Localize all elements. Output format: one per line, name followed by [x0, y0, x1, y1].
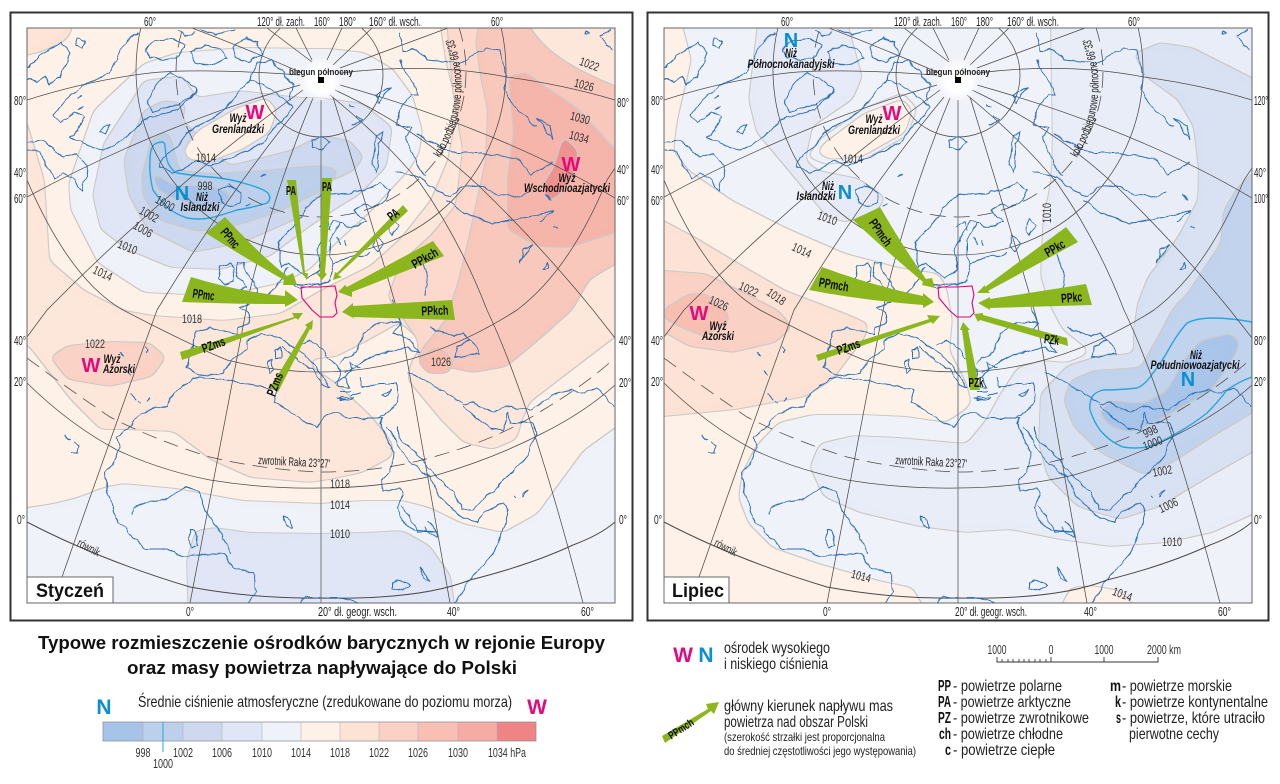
graticule labels: 120° dł. zach. [894, 14, 942, 29]
legend: high and low pressure centres: W [673, 644, 693, 667]
pressure legend: 1026 [408, 745, 428, 760]
pressure centres July: N [1181, 369, 1195, 391]
graticule labels: 60° [581, 604, 594, 619]
graticule [664, 0, 1252, 603]
graticule labels: 40° [651, 333, 663, 348]
month label January: Styczeń [36, 581, 104, 602]
isobar and parallel labels: 1014 [91, 263, 115, 284]
pressure centres July: W [690, 303, 709, 325]
graticule labels: 20° dł. geogr. wsch. [955, 604, 1027, 619]
isobar and parallel labels: 1000 [1141, 433, 1165, 453]
pressure centres July [690, 30, 1240, 391]
graticule labels: 60° [1128, 14, 1140, 29]
graticule labels: 60° [14, 191, 26, 206]
pressure centres July: Niż [1190, 348, 1202, 362]
legend: high and low pressure centres: ośrodek wysokiego [724, 640, 830, 657]
graticule labels: 40° [14, 165, 26, 180]
air mass arrows January: PZms [200, 334, 227, 356]
graticule labels: 0° [619, 512, 627, 527]
pressure centres July: Azorski [701, 329, 734, 343]
pressure centres July: Grenlandzki [848, 123, 901, 137]
legend: air mass abbreviations, right column: - powietrze morskie [1122, 678, 1232, 695]
pressure centres January: Islandzki [180, 200, 220, 214]
Polish border [938, 286, 974, 317]
isobar and parallel labels: 1000 [153, 192, 177, 215]
pressure centres January: Grenlandzki [212, 122, 265, 136]
isobar and parallel labels: 1014 [1111, 584, 1134, 604]
north pole marker: biegun północny [926, 67, 991, 78]
pressure legend: 1014 [291, 745, 311, 760]
air mass arrows January: PPmc [192, 286, 216, 304]
isobar and parallel labels: 998 [1141, 422, 1160, 441]
legend: air mass abbreviations, left column [938, 678, 1089, 759]
air mass arrows July: PPkc [1042, 236, 1068, 260]
legend: air mass abbreviations, right column: k [1115, 694, 1121, 711]
air mass arrows July: PZms [835, 336, 862, 358]
legend: high and low pressure centres: N [698, 644, 714, 667]
legend: air mass abbreviations, left column: ch [939, 726, 951, 743]
month label July [664, 577, 729, 603]
graticule labels: 20° [14, 374, 26, 389]
graticule labels: 80° [1254, 333, 1266, 348]
pressure centres January: Wyż [558, 171, 576, 185]
graticule labels: 60° [651, 193, 663, 208]
isobar and parallel labels: 1002 [137, 203, 161, 226]
graticule labels: 20° [651, 374, 663, 389]
air mass arrows January: PPkch [409, 245, 441, 272]
legend: air mass abbreviations, left column: - powietrze ciepłe [953, 742, 1055, 759]
pressure centres July: Wyż [710, 319, 726, 333]
air mass arrows July: PPkc [1060, 289, 1083, 306]
air mass arrows January: PZms [263, 370, 286, 398]
pressure legend [96, 692, 547, 771]
graticule labels: 40° [617, 162, 629, 177]
legend: air mass abbreviations, right column: s [1116, 710, 1121, 727]
panel: January map [10, 12, 634, 622]
isobar and parallel labels: 1014 [790, 240, 814, 261]
pressure centres January: W [562, 154, 581, 176]
coastlines [665, 30, 1250, 603]
isobar and parallel labels: 1018 [330, 477, 350, 491]
isobar and parallel labels: koło podbiegunowe północne 66°33' [1070, 40, 1101, 158]
isobar and parallel labels: 1026 [707, 293, 731, 314]
graticule labels: 0° [186, 604, 194, 619]
air mass arrows January: PPkch [421, 303, 449, 318]
pressure centres January: Niż [196, 190, 208, 204]
isobar and parallel labels: 1018 [182, 312, 202, 326]
isobar and parallel labels: 1010 [1162, 535, 1182, 549]
graticule labels: 160° [314, 14, 330, 29]
north pole marker: biegun północny [289, 67, 354, 78]
legend: air mass arrow: do średniej częstotliwości jego występowania) [724, 744, 916, 758]
isobar and parallel labels: 1022 [737, 279, 761, 300]
graticule labels: 20° dł. geogr. wsch. [318, 604, 397, 619]
isobar and parallel labels: 1018 [764, 285, 789, 308]
scale bar [988, 642, 1181, 662]
legend: air mass abbreviations, right column: m [1110, 678, 1121, 695]
air mass arrows January: PA [322, 179, 332, 194]
isobar and parallel labels: zwrotnik Raka 23°27' [258, 453, 330, 471]
pressure legend: 998 [136, 745, 150, 760]
graticule labels: 160° [951, 14, 967, 29]
legend: high and low pressure centres: i niskiego ciśnienia [724, 656, 828, 673]
graticule labels: 0° [823, 604, 831, 619]
pressure centres January: Wschodnioazjatycki [524, 181, 610, 195]
graticule labels [14, 14, 631, 619]
isobar and parallel labels: 1014 [196, 151, 216, 165]
map border [664, 28, 1252, 603]
graticule labels: 60° [617, 193, 629, 208]
pressure legend: Średnie ciśnienie atmosferyczne (zredukowane do poziomu morza) [138, 692, 512, 711]
pressure fields July [664, 28, 1252, 602]
coastlines [28, 30, 613, 603]
graticule labels: 20° [1254, 374, 1266, 389]
pressure legend: W [527, 696, 547, 719]
panel: July map [646, 12, 1270, 622]
graticule [27, 0, 615, 603]
title: oraz masy powietrza napływające do Polski [127, 657, 517, 678]
legend: high and low pressure centres [673, 640, 830, 673]
month label July: Lipiec [672, 581, 724, 602]
isobar and parallel labels [707, 40, 1182, 604]
graticule labels: 40° [651, 162, 663, 177]
graticule labels: 0° [1254, 512, 1262, 527]
air mass arrows January: PPmc [218, 225, 243, 251]
isobar and parallel labels [75, 40, 601, 560]
pressure centres January: W [82, 355, 101, 377]
isobar and parallel labels: 1026 [431, 355, 451, 369]
graticule labels: 120° dł. zach. [257, 14, 305, 29]
scale bar: 2000 km [1147, 642, 1181, 657]
air mass arrows July: PZk [1043, 331, 1061, 348]
isobar and parallel labels: równik [712, 536, 740, 560]
graticule labels: 40° [14, 333, 26, 348]
pressure centres January: W [246, 102, 265, 124]
pressure centres July: Południowoazjatycki [1150, 358, 1240, 372]
legend: air mass arrow [662, 698, 916, 758]
graticule labels: 60° [1218, 604, 1231, 619]
legend: air mass abbreviations, left column: - powietrze zwrotnikowe [953, 710, 1089, 727]
pressure centres January [82, 102, 610, 377]
isobar and parallel labels: 1022 [85, 337, 105, 351]
pressure centres January: Azorski [102, 362, 135, 376]
graticule labels: 40° [1084, 604, 1097, 619]
pressure legend: 1002 [173, 745, 193, 760]
legend: air mass abbreviations, left column: c [945, 742, 951, 759]
legend: air mass arrow: główny kierunek napływu mas [724, 698, 893, 715]
pressure centres January: Wyż [230, 111, 246, 125]
pressure centres January: Wyż [104, 352, 120, 366]
north pole marker [289, 58, 354, 102]
graticule labels: 180° [339, 14, 356, 29]
isobar and parallel labels: 1022 [578, 54, 601, 74]
pressure legend: 1006 [212, 745, 232, 760]
legend: air mass abbreviations, left column: PA [938, 694, 951, 711]
scale bar: 1000 [1094, 642, 1114, 657]
pressure centres July: Niż [822, 179, 834, 193]
pressure legend: N [96, 696, 112, 719]
isobar and parallel labels: 1030 [569, 109, 592, 128]
isobar and parallel labels: 998 [198, 179, 213, 193]
graticule labels: 160° dł. wsch. [369, 14, 421, 29]
isobar and parallel labels: 1006 [1156, 495, 1181, 516]
isobar and parallel labels: 1010 [330, 527, 350, 541]
map border [27, 28, 615, 603]
month label January [27, 577, 113, 603]
legend: air mass abbreviations, left column: - powietrze arktyczne [953, 694, 1071, 711]
graticule labels: 0° [654, 512, 662, 527]
scale bar: 1000 [988, 642, 1006, 657]
air mass arrows July: PPmch [818, 275, 850, 295]
isobar and parallel labels: zwrotnik Raka 23°27' [895, 453, 967, 471]
isobar and parallel labels: równik [75, 536, 103, 560]
legend: air mass abbreviations, left column: PP [938, 678, 951, 695]
isobar and parallel labels: 1014 [843, 152, 863, 166]
legend: air mass abbreviations, left column: PZ [938, 710, 951, 727]
pressure centres July: Niż [785, 46, 797, 60]
pressure legend: 1034 hPa [488, 745, 527, 760]
graticule labels: 80° [14, 93, 26, 108]
title: Typowe rozmieszczenie ośrodków barycznych w rejonie Europy [38, 632, 606, 653]
isobar and parallel labels: 1034 [568, 128, 591, 147]
isobar and parallel labels: koło podbiegunowe północne 66°33' [432, 40, 464, 158]
graticule labels: 0° [17, 512, 25, 527]
air mass arrows January [180, 178, 455, 398]
pressure centres July: W [883, 103, 902, 125]
north pole marker [926, 58, 991, 102]
isobar and parallel labels: 1002 [1151, 462, 1174, 480]
graticule labels: 20° [619, 375, 631, 390]
isobar and parallel labels: 1026 [573, 76, 596, 95]
pressure legend: 1030 [448, 745, 468, 760]
pressure centres July: N [784, 30, 798, 52]
graticule labels [651, 14, 1268, 619]
air mass arrows July: PZk [968, 375, 984, 390]
legend: air mass arrow: PPmch [666, 717, 697, 742]
isobar and parallel labels: 1006 [131, 218, 155, 241]
air mass arrows January: PA [286, 183, 296, 198]
legend: air mass abbreviations, left column: - powietrze polarne [953, 678, 1062, 695]
pressure centres July: Islandzki [796, 189, 836, 203]
graticule labels: 60° [491, 14, 503, 29]
isobar and parallel labels: 1010 [1040, 203, 1054, 223]
isobar and parallel labels: 1010 [116, 237, 140, 258]
scale bar: 0 [1048, 642, 1054, 657]
graticule labels: 40° [1254, 165, 1266, 180]
graticule labels: 40° [447, 604, 460, 619]
legend: air mass abbreviations, right column: pierwotne cechy [1129, 726, 1219, 743]
isobar and parallel labels: 1010 [816, 208, 839, 228]
legend: air mass abbreviations, right column [1110, 678, 1268, 743]
isobar and parallel labels: 1014 [330, 498, 350, 512]
graticule labels: 160° dł. wsch. [1007, 14, 1059, 29]
pressure centres January: N [175, 183, 189, 205]
graticule labels: 80° [617, 95, 629, 110]
pressure legend: 1018 [330, 745, 350, 760]
pressure legend: 1022 [369, 745, 389, 760]
pressure centres July: Północnokanadyjski [748, 57, 835, 71]
isobar 1000 [1090, 318, 1252, 448]
air mass arrows July [809, 207, 1092, 390]
Polish border [301, 286, 337, 317]
pressure legend: 1000 [153, 756, 173, 771]
pressure fields January [28, 28, 614, 602]
legend: air mass abbreviations, left column: - powietrze chłodne [953, 726, 1063, 743]
pressure legend: 1010 [252, 745, 272, 760]
graticule labels: 60° [144, 14, 156, 29]
legend: air mass arrow: (szerokość strzałki jest proporcjonalna [724, 730, 885, 744]
title [38, 632, 606, 678]
pressure centres July: N [838, 182, 852, 204]
air mass arrows July: PPmch [866, 216, 895, 249]
isobar and parallel labels: 1014 [850, 567, 873, 586]
air mass arrows January: PA [384, 205, 402, 224]
pressure centres July: Wyż [866, 112, 882, 126]
graticule labels: 80° [651, 93, 663, 108]
isobar 1000 [150, 142, 270, 219]
graticule labels: 40° [619, 333, 631, 348]
graticule labels: 60° [781, 14, 793, 29]
graticule labels: 180° [976, 14, 993, 29]
legend: air mass arrow: powietrza nad obszar Polski [724, 714, 868, 731]
